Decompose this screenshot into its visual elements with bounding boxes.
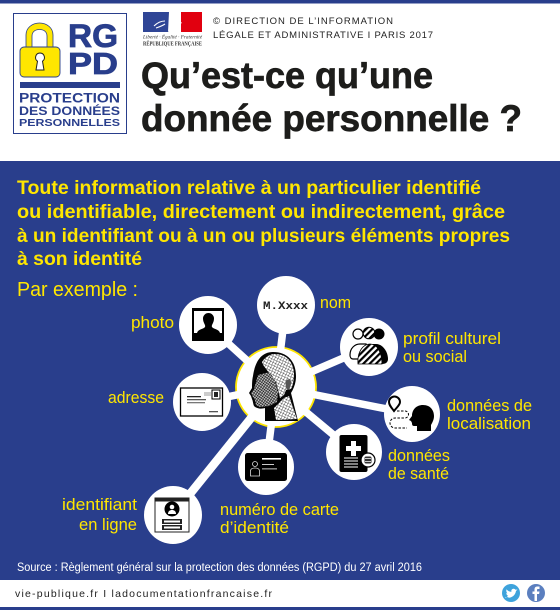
publisher credit: © DIRECTION DE L’INFORMATION <box>213 16 393 27</box>
logo: République Française: Liberté · Égalité · Fraternité <box>142 34 203 40</box>
icon: person and route <box>389 396 434 431</box>
icon: envelope <box>180 388 222 416</box>
icon: twitter <box>502 584 520 602</box>
label: photo: photo <box>131 313 174 332</box>
label: identifiant en ligne: en ligne <box>79 515 137 534</box>
icon: portrait <box>192 308 224 341</box>
logo: RGPD <box>14 14 126 134</box>
label: numéro de carte d'identité <box>220 500 339 537</box>
icon: group of people <box>350 327 388 364</box>
node: adresse <box>173 373 231 431</box>
logo: RGPD: DES DONNÉES <box>19 105 120 118</box>
label: numéro de carte d'identité: d’identité <box>220 518 289 537</box>
node: nom <box>257 276 315 334</box>
publisher credit: LÉGALE ET ADMINISTRATIVE I PARIS 2017 <box>213 30 433 41</box>
icon: padlock <box>20 23 60 77</box>
definition text: ou identifiable, directement ou indirectement, grâce <box>17 201 505 223</box>
definition text: à son identité <box>17 248 142 270</box>
label: profil culturel: profil culturel <box>403 329 501 348</box>
node: profil culturel <box>340 318 398 376</box>
title: Qu’est-ce qu’une <box>141 55 433 96</box>
label: profil culturel <box>403 329 501 366</box>
source: Source : Règlement général sur la protection des données (RGPD) du 27 avril 2016 <box>17 562 422 574</box>
footer links: vie-publique.fr I ladocumentationfrancaise.fr <box>15 588 272 600</box>
label: nom: nom <box>320 293 351 312</box>
definition text: à un identifiant ou à un ou plusieurs éléments propres <box>17 225 510 247</box>
logo: République Française: RÉPUBLIQUE FRANÇAISE <box>143 40 202 48</box>
node: nom: M.Xxxx <box>263 301 308 313</box>
logo: République Française <box>142 12 203 48</box>
label: adresse: adresse <box>108 388 164 407</box>
node: photo <box>179 296 237 354</box>
definition text: Toute information relative à un particulier identifié <box>17 177 481 199</box>
title: donnée personnelle ? <box>141 98 522 139</box>
icon: facebook <box>527 584 545 602</box>
node: localisation <box>384 386 440 442</box>
subheading: Par exemple : <box>17 279 138 301</box>
label: données de localisation: données de <box>447 396 532 415</box>
label: données de santé <box>388 446 450 483</box>
label: profil culturel: ou social <box>403 347 467 366</box>
logo: RGPD: PROTECTION <box>19 90 120 106</box>
label: identifiant en ligne <box>62 495 137 534</box>
icon: login window <box>155 498 189 532</box>
connectors <box>173 305 412 515</box>
node: identifiant en ligne <box>144 486 202 544</box>
title <box>141 55 522 139</box>
label: numéro de carte d'identité: numéro de carte <box>220 500 339 519</box>
label: données de santé: données <box>388 446 450 465</box>
label: données de santé: de santé <box>388 464 449 483</box>
panel: definition background <box>0 161 560 580</box>
definition text <box>17 177 510 270</box>
publisher credit <box>213 16 433 41</box>
icon: identity card <box>245 453 287 481</box>
logo: RGPD: PD <box>68 46 118 81</box>
node: santé <box>326 424 382 480</box>
icon: medical file <box>340 435 375 472</box>
logo: RGPD: RG <box>68 18 118 54</box>
logo: RGPD: PERSONNELLES <box>19 117 120 129</box>
central ring <box>236 347 316 427</box>
central head <box>238 348 314 426</box>
node: carte d'identité <box>238 439 294 495</box>
label: identifiant en ligne: identifiant <box>62 495 137 514</box>
label: données de localisation: localisation <box>447 414 531 433</box>
label: données de localisation <box>447 396 532 433</box>
